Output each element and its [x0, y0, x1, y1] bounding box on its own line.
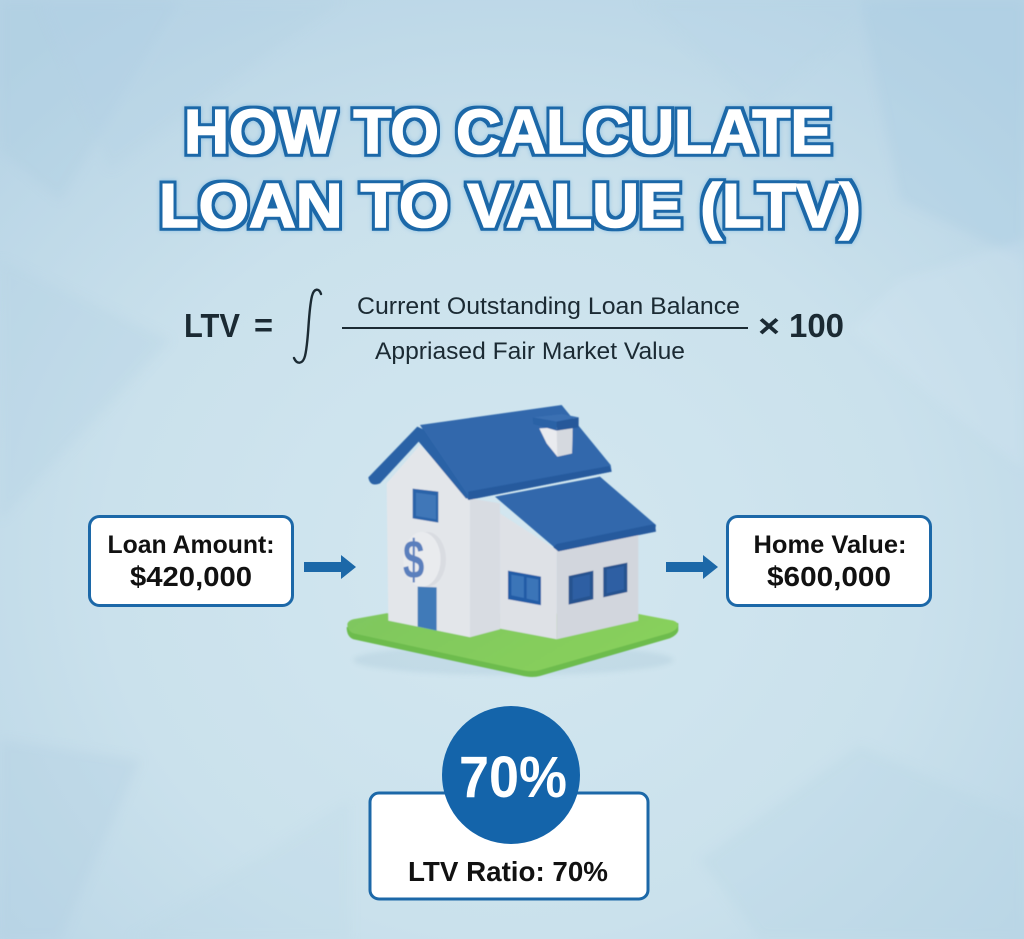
- formula: [184, 290, 844, 365]
- formula: integral sign: [294, 290, 321, 363]
- house: main roof: [368, 405, 612, 500]
- panel: home value: [728, 516, 930, 606]
- house: door: [418, 587, 437, 631]
- formula: denominator: Appriased Fair Market Value: [375, 338, 685, 365]
- title: LOAN TO VALUE (LTV): [159, 172, 861, 241]
- house: dollar medallion: $: [403, 529, 424, 591]
- house: right windows: [569, 563, 627, 605]
- icon: house with dollar sign: [347, 405, 678, 677]
- ratio label: LTV Ratio: 70%: [408, 856, 608, 887]
- formula: equals: =: [254, 307, 273, 343]
- formula: LTV: LTV: [184, 307, 240, 344]
- formula: times: ×: [758, 308, 780, 344]
- house: side double window: [508, 571, 541, 605]
- formula: 100: 100: [789, 307, 844, 344]
- arrow: loan to house: [304, 555, 356, 579]
- home value amount: $600,000: [767, 561, 891, 592]
- house: upper window: [413, 489, 438, 523]
- panel: loan amount: [90, 516, 292, 606]
- panel: LTV ratio result: [370, 706, 648, 899]
- loan amount value: $420,000: [130, 561, 252, 592]
- title: [159, 98, 861, 241]
- formula: fraction bar: [342, 327, 748, 329]
- arrow: house to value: [666, 555, 718, 579]
- formula: numerator: Current Outstanding Loan Balance: [357, 293, 740, 320]
- ratio badge: 70%: [459, 745, 567, 810]
- house: walls: [387, 445, 638, 639]
- loan amount label: Loan Amount:: [108, 531, 274, 559]
- house: lower roof: [495, 477, 656, 551]
- title: HOW TO CALCULATE: [184, 98, 832, 167]
- house: lawn: [347, 613, 678, 677]
- ratio badge: [442, 706, 580, 844]
- house: chimney: [533, 414, 579, 457]
- home value label: Home Value:: [754, 531, 906, 559]
